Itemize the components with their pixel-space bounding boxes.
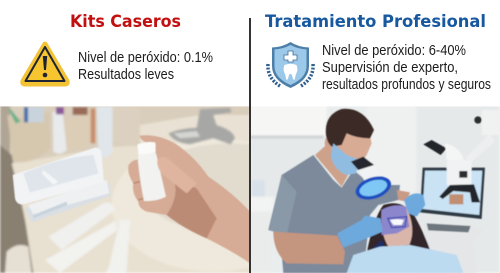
text: kits details: Resultados leves	[78, 67, 174, 83]
monitor	[420, 168, 485, 219]
text: treatment details	[322, 43, 491, 93]
dentist scrubs	[268, 155, 400, 273]
patient hair	[367, 203, 431, 253]
trays	[25, 183, 111, 222]
icon: laurel right	[301, 64, 313, 86]
light ring	[358, 158, 382, 182]
text: treatment details: Nivel de peróxido: 6-40%	[322, 43, 466, 59]
centre divider	[249, 18, 251, 273]
text: kits details: Nivel de peróxido: 0.1%	[78, 50, 213, 66]
text: kits details	[78, 50, 213, 83]
faucet	[168, 108, 235, 144]
icon: shield with tooth	[268, 42, 313, 88]
text: treatment details: Supervisión de experto,	[322, 60, 458, 76]
tubes	[48, 202, 115, 250]
microscope arm	[465, 133, 495, 162]
photo: dentist with blue light	[250, 105, 500, 273]
thumb	[157, 157, 197, 193]
equipment cart	[422, 224, 470, 248]
icon: laurel left	[268, 64, 280, 86]
heading: Tratamiento Profesional: Tratamiento Profesional	[265, 12, 486, 31]
dentist head	[336, 133, 372, 160]
heading: Kits Caseros: Kits Caseros	[70, 12, 181, 31]
panel: kits caseros header	[23, 12, 213, 84]
icon: warning triangle	[23, 44, 67, 84]
panel: tratamiento profesional header	[265, 12, 491, 93]
patient drape	[347, 245, 463, 273]
bottle	[138, 152, 166, 201]
photo: home kit at bathroom sink	[0, 106, 249, 273]
dentist neck	[315, 142, 350, 187]
hand	[128, 135, 250, 263]
patient face	[381, 206, 412, 247]
gloves	[337, 216, 383, 248]
